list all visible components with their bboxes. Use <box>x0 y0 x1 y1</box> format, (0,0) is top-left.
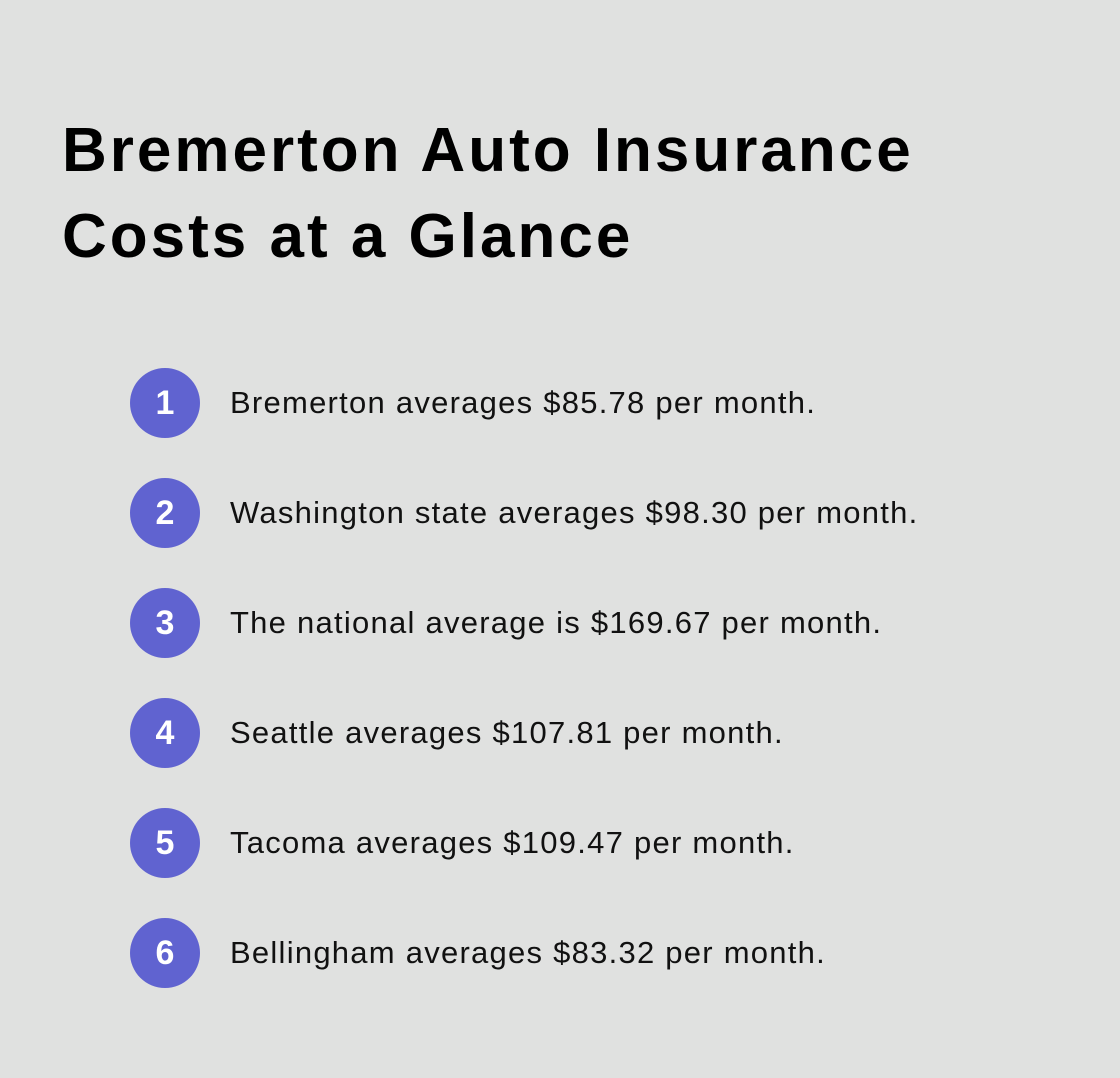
item 1 <box>130 368 816 438</box>
item 3: 3 <box>156 604 174 642</box>
item 5 <box>130 808 795 878</box>
item 5: Tacoma averages $109.47 per month. <box>230 825 795 860</box>
item 3: The national average is $169.67 per month. <box>230 605 882 640</box>
item 4: Seattle averages $107.81 per month. <box>230 715 784 750</box>
title <box>62 116 914 271</box>
item 2: Washington state averages $98.30 per month. <box>230 495 918 530</box>
item 6: 6 <box>156 934 174 972</box>
item 5: 5 <box>156 824 174 862</box>
item 1: Bremerton averages $85.78 per month. <box>230 385 816 420</box>
item 1: 1 <box>156 384 174 422</box>
title: Costs at a Glance <box>62 202 633 271</box>
item 4 <box>130 698 784 768</box>
item 2 <box>130 478 918 548</box>
title: Bremerton Auto Insurance <box>62 116 914 185</box>
item 3 <box>130 588 882 658</box>
item 6 <box>130 918 826 988</box>
item 6: Bellingham averages $83.32 per month. <box>230 935 826 970</box>
item 2: 2 <box>156 494 174 532</box>
item 4: 4 <box>156 714 174 752</box>
